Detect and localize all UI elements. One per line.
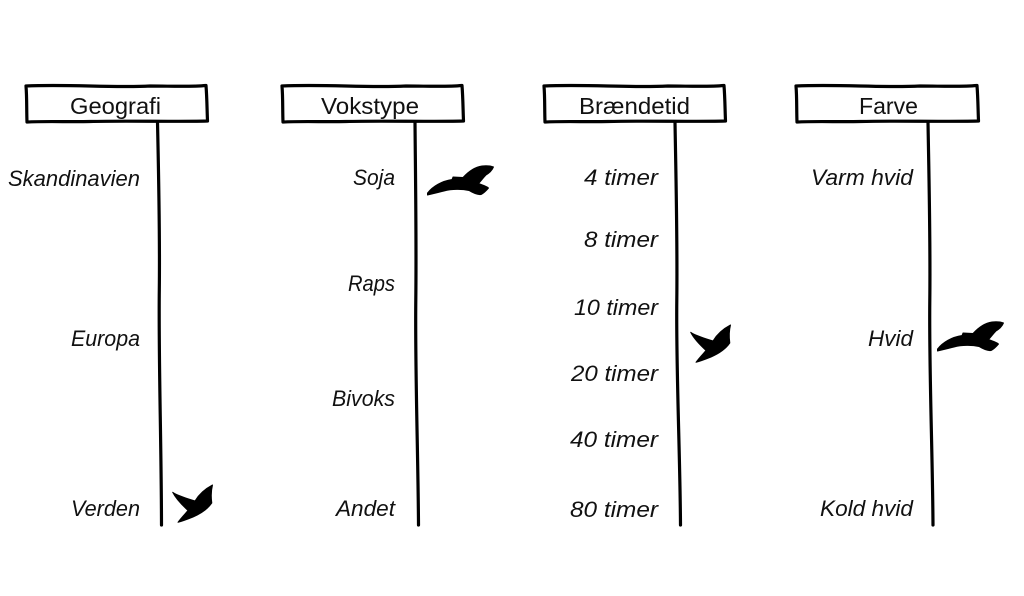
- heading: Farve: Farve: [859, 93, 918, 119]
- label: Verden: Verden: [71, 496, 140, 521]
- heading: Vokstype: Vokstype: [321, 93, 419, 119]
- label: Hvid: Hvid: [868, 326, 914, 351]
- header box: Vokstype: [282, 85, 464, 122]
- heading: Brændetid: Brændetid: [579, 93, 690, 119]
- label: Europa: Europa: [71, 326, 140, 351]
- label: 8 timer: 8 timer: [584, 227, 660, 252]
- label: 10 timer: 10 timer: [574, 295, 660, 320]
- header box: Farve: [796, 85, 978, 122]
- label: Varm hvid: Varm hvid: [811, 165, 914, 190]
- icon: bird marker at Soja: [428, 166, 494, 195]
- heading: Geografi: Geografi: [70, 93, 161, 119]
- axis line: Brændetid: [675, 122, 680, 525]
- axis line: Vokstype: [415, 122, 418, 525]
- label: 80 timer: 80 timer: [570, 497, 660, 522]
- icon: bird marker at 10–20 timer: [691, 325, 730, 362]
- axis line: Geografi: [158, 122, 162, 525]
- header box: Geografi: [26, 85, 208, 122]
- label: 4 timer: 4 timer: [584, 165, 660, 190]
- icon: bird marker at Hvid: [938, 322, 1004, 351]
- column: Geografi: [8, 85, 212, 525]
- column: Farve: [796, 85, 1004, 525]
- label: Raps: Raps: [348, 271, 395, 296]
- label: Bivoks: Bivoks: [332, 386, 395, 411]
- label: Soja: Soja: [353, 165, 395, 190]
- icon: bird marker at Verden: [173, 485, 212, 522]
- column: Vokstype: [282, 85, 494, 525]
- label: Kold hvid: Kold hvid: [820, 496, 914, 521]
- column: Brændetid: [544, 85, 730, 525]
- label: Andet: Andet: [334, 496, 396, 521]
- label: 20 timer: 20 timer: [570, 361, 660, 386]
- header box: Brændetid: [544, 85, 726, 122]
- label: 40 timer: 40 timer: [570, 427, 660, 452]
- axis line: Farve: [928, 122, 933, 525]
- label: Skandinavien: Skandinavien: [8, 166, 140, 191]
